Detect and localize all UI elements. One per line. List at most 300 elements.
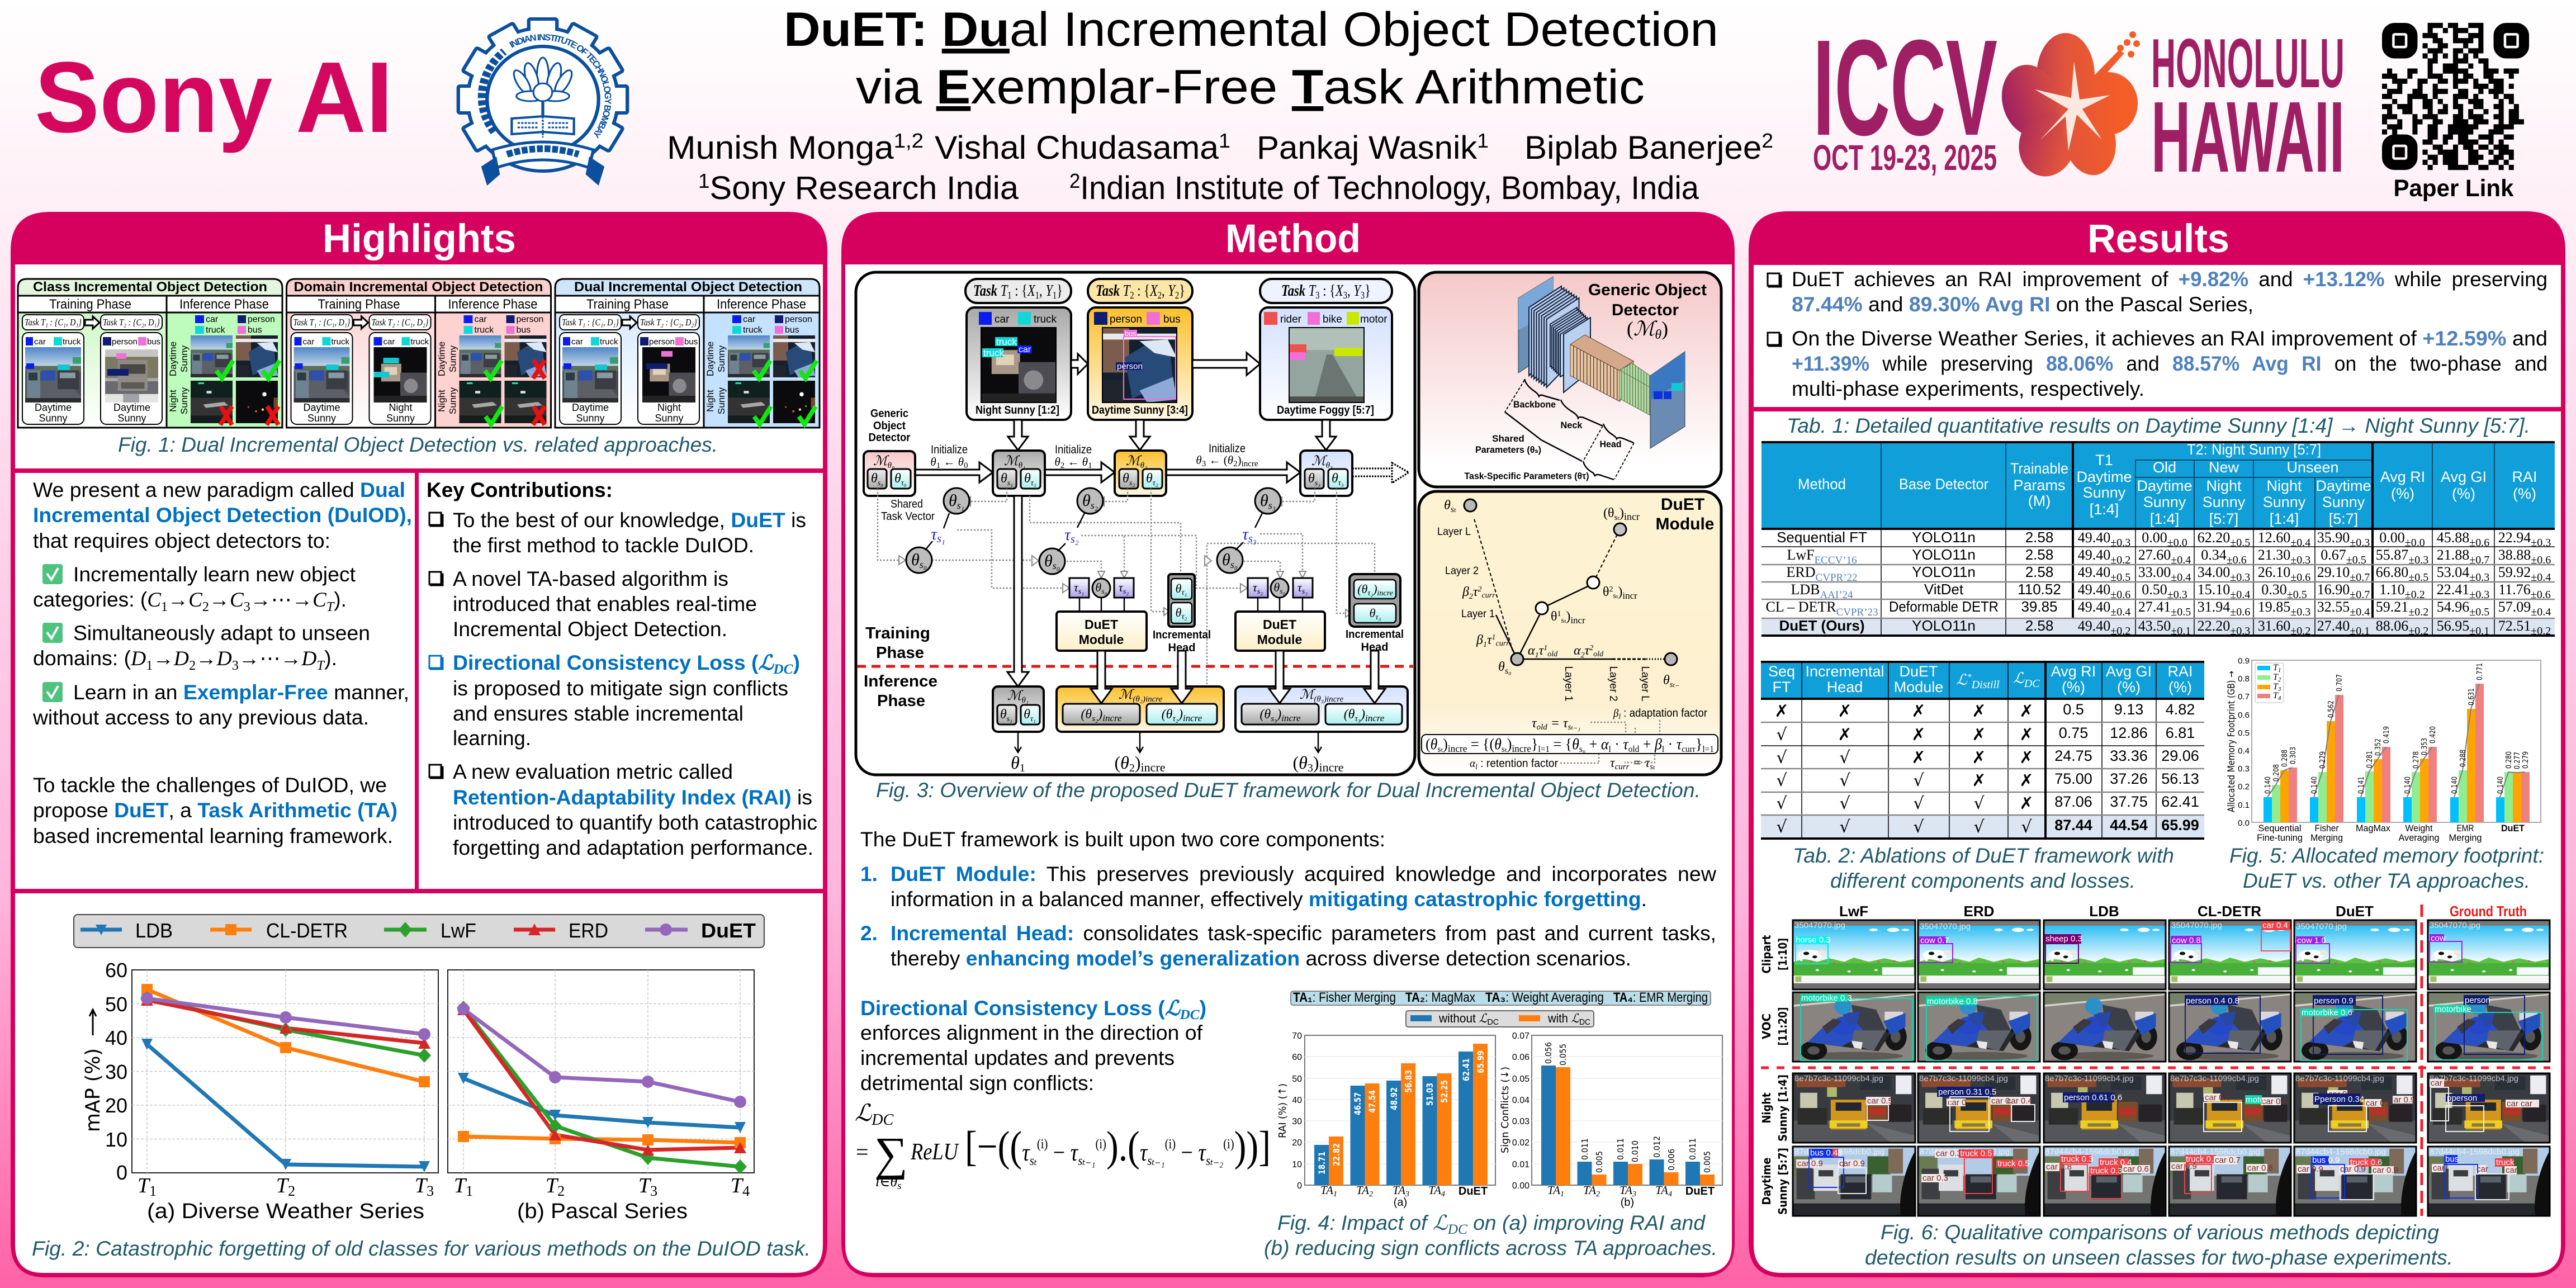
task pills: , <box>1347 282 1353 300</box>
text block: key contributions: ) <box>793 651 800 674</box>
row: Night Sunny: 8e7b7c3c-11099cb4.jpg <box>2295 1074 2384 1083</box>
text block: core components: Incremental Head: consolidates task-specific parameters from past and current tasks, <box>891 922 1716 945</box>
scheme: dual incremental: Sunny <box>716 345 727 372</box>
affiliations: Sony Research India <box>710 170 1019 206</box>
table 1 body: ±0.4 <box>2110 606 2130 618</box>
chart a: RAI: DuET <box>1459 1185 1488 1197</box>
text block: paradigm introduction: 3 <box>244 600 250 614</box>
legend: factors: l <box>1618 713 1621 721</box>
legend: factors: : adaptation factor <box>1621 707 1707 719</box>
row: Night Sunny: car car <box>2507 1099 2532 1109</box>
formula: L_DC: i∈θ <box>875 1173 897 1190</box>
scheme: dual incremental: person <box>649 337 675 347</box>
row: Clipart: cow 0.7 <box>1920 936 1949 945</box>
row: Clipart: cow 1.0 <box>2297 936 2326 945</box>
authors: 1,2 <box>894 129 924 152</box>
caption: table 2: different components and losses. <box>1830 869 2135 892</box>
text block: paradigm introduction: 2 <box>202 600 209 614</box>
chart: allocated memory footprint: DuET <box>2501 823 2525 834</box>
labels: network parts: Backbone <box>1513 399 1556 410</box>
table 1 body: 11.76 <box>2498 581 2531 598</box>
incremental heads: incre <box>1377 589 1393 598</box>
legend: TA approaches: TA₃: Weight Averaging <box>1485 990 1604 1005</box>
value labels: 0.140 <box>2264 776 2272 794</box>
text block: directional consistency loss: enforces alignment in the direction of <box>860 1021 1203 1044</box>
table 2 header: Avg RI <box>2051 663 2096 680</box>
panel: DuET module <box>1419 491 1721 775</box>
phase labels: Phase <box>877 692 925 710</box>
row: VOC: person 0.4 0.8 <box>2186 996 2239 1006</box>
panel: generic object detector <box>1419 272 1721 487</box>
inference models: (θ₂)incre <box>1133 695 1163 704</box>
inference models: ) <box>1097 707 1102 722</box>
value labels: 0.288 <box>2459 750 2468 767</box>
table 1 body: 54.96 <box>2437 599 2469 615</box>
formula: L_DC: s <box>897 1180 902 1192</box>
scheme: dual incremental: bus <box>684 337 698 347</box>
legend: factors: sₜ <box>1650 763 1655 771</box>
scheme: domain incremental: person <box>517 315 543 324</box>
table 1 body: DuET (Ours) <box>1779 617 1865 634</box>
inference models: ) <box>1177 707 1183 722</box>
chart b: sign conflicts: 0.006 <box>1666 1149 1677 1171</box>
chart a: RAI: 30 <box>1292 1117 1302 1126</box>
incremental heads: τ₃ <box>1375 613 1381 622</box>
QR code <box>2382 26 2524 167</box>
text block: result summary: multi-phase experiments, respectively. <box>1792 377 2144 400</box>
logo: IIT Bombay: INDIAN INSTITUTE OF TECHNOLOGY BOMBAY <box>509 34 612 139</box>
equation box: l <box>1608 745 1611 754</box>
heading: Generic Object <box>1588 281 1707 299</box>
formula: L_DC: sₜ <box>1030 1154 1037 1168</box>
labels: initialize: 0 <box>964 461 968 470</box>
formula: θ <box>1655 328 1661 342</box>
table 1 body: 38.88 <box>2498 547 2531 563</box>
row: Clipart: 35047070.jpg <box>2296 922 2347 931</box>
text: HONOLULU <box>2151 25 2345 102</box>
labels: initialize: θ <box>1228 453 1233 467</box>
table 1 body: 2.58 <box>2025 564 2053 580</box>
table 1 body: 59.21 <box>2376 599 2408 615</box>
table 1 body: Sequential FT <box>1777 529 1867 546</box>
card: Daytime Foggy: Daytime Foggy [5:7] <box>1277 404 1374 416</box>
equation box: incre <box>1512 743 1531 754</box>
table 1 header: Params <box>2013 477 2066 494</box>
title: DuET: Dual Incremental Object Detection <box>784 3 1718 56</box>
text block: core components <box>860 828 1716 970</box>
legend: TA approaches: TA₁: Fisher Merging <box>1293 990 1396 1005</box>
row: Night Sunny: 8e7b7c3c-11099cb4.jpg <box>2045 1074 2134 1083</box>
table 1 body: CL – DETR <box>1765 599 1836 615</box>
task pills: X <box>1027 282 1035 300</box>
x axis tick labels: 1 <box>149 1183 157 1199</box>
update geometry: 2 <box>1478 585 1482 594</box>
scheme: domain incremental: Sunny <box>447 345 458 372</box>
phase labels <box>864 624 937 710</box>
update geometry: τ <box>1539 643 1545 658</box>
dotted connections <box>878 489 1378 704</box>
chart b: sign conflicts: Sign Conflicts (↓) <box>1499 1067 1511 1153</box>
duet inputs: s₀ <box>1280 588 1286 596</box>
text block: paradigm introduction: T <box>326 600 335 614</box>
labels: initialize: 3 <box>1202 460 1206 468</box>
heading: Module <box>1656 515 1714 533</box>
table 1 body: ±0.2 <box>2531 625 2551 637</box>
formula: L_DC: ∑ <box>874 1128 908 1180</box>
table 2 body: √ <box>1913 794 1924 813</box>
y axis tick labels: 40 <box>105 1026 127 1049</box>
table 2 body: 87.06 <box>2054 793 2092 810</box>
formula: L_DC: (i) <box>1165 1137 1176 1152</box>
text block: key contributions: To the best of our knowledge, DuET is <box>453 509 806 532</box>
row: Night Sunny: car 0. <box>1948 1098 1969 1107</box>
axes: 0.2 <box>2238 782 2250 792</box>
y axis tick labels: 20 <box>105 1094 127 1117</box>
models: per task: s₁ <box>1007 479 1013 487</box>
text block: paradigm introduction: propose DuET, a Task Arithmetic (TA) <box>33 799 397 822</box>
card: Night Sunny: car <box>1019 345 1031 354</box>
chart b: sign conflicts: 1 <box>1560 1190 1564 1199</box>
table 2 header: Seq <box>1768 663 1795 680</box>
card: Night Sunny: truck <box>996 337 1017 347</box>
incremental heads: Incremental <box>1153 629 1211 641</box>
incremental heads: Head <box>1168 642 1195 654</box>
table 1 body: 32.55 <box>2317 599 2350 615</box>
value labels: 0.140 <box>2451 776 2459 794</box>
task vectors and theta nodes: τ <box>1242 525 1248 543</box>
labels: initialize: θ <box>958 455 964 468</box>
icon: bullet box <box>429 656 443 669</box>
chart b: sign conflicts: 0.005 <box>1702 1151 1712 1173</box>
text block: result summary: 87.44% and 89.30% Avg RI on the Pascal Series, <box>1792 293 2253 316</box>
update geometry <box>1437 498 1679 702</box>
label: generic object detector: Detector <box>869 432 911 444</box>
table 1 header: (%) <box>2452 485 2475 502</box>
scheme: dual incremental: Daytime <box>572 402 609 413</box>
task vectors and theta nodes: s₁ <box>937 533 945 545</box>
text block: paradigm introduction: → <box>153 647 174 670</box>
update geometry: τ <box>1473 585 1479 599</box>
scheme: dual incremental: car <box>571 337 583 347</box>
row: Daytime Sunny: 87d44cb4-1598dcb0.jpg <box>1920 1147 2010 1157</box>
models: per task: s₀ <box>878 479 883 487</box>
row: Night Sunny: pperson <box>2447 1093 2477 1103</box>
models: per task: τ₀ <box>901 479 907 487</box>
row: Night Sunny: 8e7b7c3c-11099cb4.jpg <box>2430 1074 2518 1083</box>
legend: 3 <box>2277 686 2281 693</box>
scheme: class incremental: Daytime <box>113 402 150 413</box>
row: Night Sunny: ar 0.9 <box>2394 1095 2415 1105</box>
models: per task <box>864 451 1352 496</box>
chart b: sign conflicts: 0.011 <box>1580 1138 1590 1160</box>
table 2 header: Avg GI <box>2106 663 2152 680</box>
table 2 body: √ <box>2021 817 2032 837</box>
text block: key contributions <box>427 479 817 859</box>
task pills: 3 <box>1315 290 1320 301</box>
task vectors and theta nodes: Shared <box>891 498 923 510</box>
chart b: sign conflicts: 2 <box>1596 1190 1600 1199</box>
legend: factors: τ <box>1610 756 1615 770</box>
task vectors and theta nodes: θ <box>949 491 957 510</box>
models: per task: θ <box>1146 471 1153 486</box>
table 1 body: 53.04 <box>2437 564 2469 580</box>
incremental heads: τ₂ <box>1367 589 1373 598</box>
row: Night Sunny: car 0.5 <box>2366 1098 2392 1108</box>
label: generic object detector: Object <box>873 420 906 432</box>
formula: (ℳ <box>1627 318 1655 340</box>
row: VOC: person 0.9 <box>2314 996 2354 1006</box>
label: generic object detector <box>869 408 911 444</box>
duet inputs: τ <box>1074 580 1078 594</box>
column headers: LwF <box>1839 903 1868 920</box>
column headers: DuET <box>2336 903 2374 920</box>
text block: paradigm introduction: T <box>317 659 325 673</box>
table 2 body: ✗ <box>1911 702 1926 721</box>
scheme: class incremental: car <box>34 337 46 347</box>
row: Night Sunny: moto <box>2246 1095 2264 1105</box>
table 1 body: ±0.5 <box>2230 537 2250 549</box>
chart: allocated memory footprint: Allocated Memory Footprint (GB) → <box>2226 671 2237 812</box>
legend: with and without L_DC: with ℒ <box>1548 1011 1580 1025</box>
table 1 body: ±0.3 <box>2408 554 2428 566</box>
row: Daytime Sunny: truck 0.3 <box>2090 1166 2123 1176</box>
task vectors and theta nodes: s₂ <box>1071 533 1079 546</box>
chart a: RAI: 47.54 <box>1367 1090 1377 1113</box>
table 2 body: 0.75 <box>2059 724 2088 741</box>
table 2 body: 37.26 <box>2110 770 2148 787</box>
chart b: sign conflicts: 0.011 <box>1688 1138 1698 1160</box>
inference models: τ₁ <box>1030 715 1036 723</box>
table 2 body: ✗ <box>1838 702 1852 721</box>
row: Clipart: horse 0.3 <box>1796 935 1831 945</box>
table 1 body: ±0.2 <box>2110 554 2130 566</box>
text block: paradigm introduction: →⋯→ <box>250 588 312 611</box>
affiliations: 2 <box>1069 169 1080 192</box>
row: Daytime Sunny: truck 0.6 <box>2350 1158 2383 1167</box>
equation box: θ <box>1572 736 1579 752</box>
axes: 0.4 <box>2238 746 2250 756</box>
x axis tick labels: 3 <box>427 1183 434 1199</box>
row: Night Sunny: car 0.4 <box>2262 1097 2288 1106</box>
labels: initialize: Initialize <box>1055 443 1092 456</box>
value labels: 0.279 <box>2522 751 2530 769</box>
row: Daytime Sunny: bus 0.48 <box>1810 1148 1843 1158</box>
models: per task: θ <box>1332 471 1338 486</box>
axes: 0.3 <box>2238 764 2250 774</box>
labels: initialize: 2 <box>1060 461 1064 470</box>
table 1 body: ±0.3 <box>2469 571 2489 584</box>
table 2 body: ✗ <box>1774 702 1789 721</box>
scheme: domain incremental: Daytime <box>303 402 340 413</box>
card: Daytime Sunny: bus <box>1163 314 1181 325</box>
table 2 body: ✗ <box>1911 725 1926 745</box>
scheme: class incremental: truck <box>63 337 81 347</box>
labels: initialize: ← ( <box>1206 453 1228 467</box>
chart a: RAI: 1 <box>1333 1190 1337 1199</box>
outputs: 2 <box>1129 762 1135 774</box>
title <box>784 3 1718 114</box>
table 1 body: ±0.6 <box>2531 589 2551 601</box>
text block: key contributions: is proposed to mitigate sign conflicts <box>453 677 788 700</box>
formula: L_DC: τ <box>1198 1139 1207 1166</box>
value labels: 0.140 <box>2497 776 2505 794</box>
scheme: domain incremental <box>286 279 551 428</box>
scheme: domain incremental: Night <box>389 402 413 413</box>
update geometry: θ <box>1498 660 1505 674</box>
task pills: , <box>1039 282 1045 300</box>
equation box: = {( <box>1467 736 1494 752</box>
scheme: dual incremental: Night <box>657 402 681 413</box>
labels: initialize: θ <box>1196 453 1202 467</box>
row: Daytime Sunny: truck 0.5 <box>1997 1159 2030 1168</box>
chart a: RAI: 46.57 <box>1352 1092 1363 1115</box>
phase labels: Phase <box>876 644 924 662</box>
module: DuET 2 <box>1235 612 1325 651</box>
label: generic object detector: Generic <box>870 408 908 420</box>
text block: paradigm introduction: 3 <box>232 659 239 673</box>
text block: key contributions: and ensures stable incremental <box>453 702 744 725</box>
card: Daytime Sunny <box>1088 307 1192 420</box>
table 2 body: √ <box>1776 771 1787 790</box>
brackets <box>1505 379 1634 480</box>
x axis tick labels <box>138 1174 750 1199</box>
chart a: RAI: 52.25 <box>1439 1080 1450 1103</box>
table 1 body: 33.00 <box>2138 564 2171 580</box>
task pills: 1 <box>1007 290 1012 301</box>
text block: directional consistency loss: ) <box>1200 997 1206 1020</box>
table 1 body: ±0.1 <box>2350 625 2370 637</box>
formula: ) <box>1661 318 1668 340</box>
legend <box>74 915 764 948</box>
task vectors and theta nodes: s₁ <box>957 500 964 511</box>
table 1 body: ±0.5 <box>2408 571 2428 584</box>
models: per task: θ₃ <box>1326 461 1333 470</box>
x axis tick labels: T <box>638 1174 650 1197</box>
x axis tick labels: T <box>454 1174 466 1197</box>
chart a: RAI: 3 <box>1405 1190 1409 1199</box>
chart a: RAI: TA <box>1320 1183 1333 1197</box>
table 1 body: ±0.0 <box>2405 537 2425 549</box>
row: Daytime Sunny: truck 0.3 <box>2061 1154 2094 1164</box>
table 1 body: 31.60 <box>2258 618 2290 634</box>
table 1 body: ±0.4 <box>2531 571 2551 584</box>
divider vertical <box>415 473 419 889</box>
scheme: class incremental: Daytime <box>35 402 72 413</box>
scheme: dual incremental: truck <box>743 325 763 335</box>
labels: initialize: Initialize <box>1209 442 1246 455</box>
update geometry: s₀ <box>1505 666 1512 676</box>
table 1 body: 27.40 <box>2317 618 2350 634</box>
duet inputs: θ <box>1273 580 1280 594</box>
table 1 body: 27.41 <box>2138 599 2171 615</box>
table 2 body: √ <box>1839 748 1850 768</box>
table 1 body: 55.87 <box>2376 547 2408 563</box>
update geometry: incr <box>1570 615 1585 626</box>
scheme: dual incremental: truck <box>600 337 618 347</box>
models: per task: θ <box>871 471 878 486</box>
row labels <box>1760 935 1789 1215</box>
row: Night Sunny: person 0.31 0.5 <box>1938 1087 1996 1097</box>
x axis tick labels: T <box>546 1174 557 1197</box>
table 1: quantitative results <box>1761 441 2555 637</box>
scheme: dual incremental: Inference Phase <box>717 297 806 312</box>
models: per task: θ <box>1308 471 1315 486</box>
arrow <box>89 1010 96 1035</box>
text block: paradigm introduction: → <box>168 588 188 611</box>
legend: CL-DETR <box>266 919 348 942</box>
update geometry: ) <box>1566 609 1570 624</box>
sub-plot labels: (b) Pascal Series <box>517 1200 688 1223</box>
x axis tick labels: T <box>138 1174 149 1197</box>
chart a: RAI: 70 <box>1292 1031 1302 1041</box>
table 1 header: Avg RI <box>2380 468 2425 485</box>
value labels: 0.208 <box>2272 764 2281 782</box>
task pills: X <box>1149 282 1158 300</box>
legend: TA approaches: TA₄: EMR Merging <box>1613 990 1708 1005</box>
caption: figure 6: Fig. 6: Qualitative comparisons of various methods depicting <box>1881 1221 2439 1244</box>
table 1 body: YOLO11n <box>1912 564 1976 580</box>
table 2 body: ✗ <box>1972 771 1986 790</box>
task pills: 1 <box>1053 290 1057 301</box>
formula: L_DC: = <box>856 1139 869 1164</box>
table 1 header <box>1761 441 2555 637</box>
equation box: θ <box>1494 736 1502 752</box>
scheme: dual incremental: Training Phase <box>586 297 669 312</box>
task vectors and theta nodes: s₃ <box>1248 533 1257 545</box>
row: Daytime Sunny: car <box>2476 1164 2488 1174</box>
formula: L_DC: DC <box>871 1111 893 1129</box>
table 1 body: 59.92 <box>2498 564 2531 580</box>
scheme: domain incremental: truck <box>474 325 494 335</box>
table 1 body: 66.80 <box>2376 564 2408 580</box>
chart b: sign conflicts: 0.011 <box>1616 1138 1626 1160</box>
inference models: ℳ <box>1119 688 1133 702</box>
legend: factors: l <box>1475 763 1478 771</box>
inference models: incre <box>1365 713 1385 723</box>
text block: result summary: On the Diverse Weather Series, it achieves an RAI improvement of +12.59% and <box>1792 327 2547 350</box>
text block: paradigm introduction: D <box>216 647 232 670</box>
formula: L_DC: ))] <box>1234 1123 1271 1170</box>
value labels: 0.631 <box>2468 688 2476 705</box>
legend: TA approaches: TA₂: MagMax <box>1405 990 1475 1005</box>
table 1 header: (%) <box>2513 485 2536 502</box>
incremental heads: θ <box>1176 605 1181 619</box>
chart: allocated memory footprint: Merging <box>2310 832 2343 843</box>
row: Night Sunny: car <box>2431 1078 2442 1088</box>
text block: result summary <box>1768 268 2547 400</box>
text block: paradigm introduction: based incremental learning framework. <box>33 825 393 847</box>
inference models: θ <box>1024 707 1030 722</box>
affiliations <box>698 169 1699 206</box>
models: per task: τ₁ <box>1031 479 1036 487</box>
scheme: class incremental: car <box>206 315 219 324</box>
scheme: domain incremental: Domain Incremental Object Detection <box>294 280 543 295</box>
table 1 body: 57.09 <box>2498 599 2531 615</box>
row: Daytime Sunny: bus <box>2445 1154 2459 1164</box>
table 1 body: 15.10 <box>2198 581 2230 598</box>
text block: paradigm introduction: C <box>312 589 327 612</box>
legend: factors: = τ <box>1629 756 1651 770</box>
y axis tick labels <box>105 959 127 1184</box>
table 2 body: ✗ <box>1972 702 1986 721</box>
table 1 header: Method <box>1798 476 1846 493</box>
table 1 body: ±0.3 <box>2290 554 2310 566</box>
labels: initialize: 2 <box>1233 460 1238 468</box>
row: Daytime Sunny: car 0.3 <box>1922 1173 1948 1183</box>
table 2 header: * <box>1967 673 1972 682</box>
chart b: sign conflicts: 0.04 <box>1512 1096 1530 1105</box>
text block: paradigm introduction: categories: (C <box>33 588 161 612</box>
